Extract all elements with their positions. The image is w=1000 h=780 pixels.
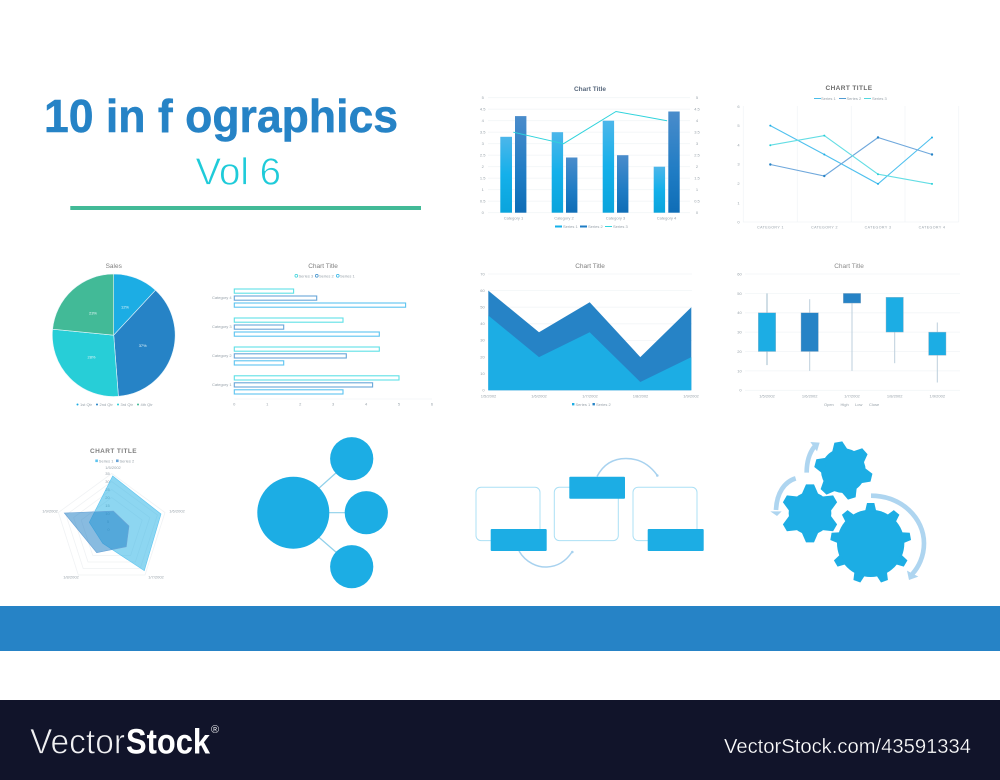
hub circle — [257, 477, 329, 549]
radar value labels: 30 — [105, 479, 110, 484]
y axis labels: 40 — [480, 321, 485, 326]
footer id: VectorStock.com/43591334 — [724, 736, 971, 758]
legend: Series 2 — [596, 402, 611, 407]
y axis labels — [737, 272, 742, 392]
date labels: 1/8/2002 — [887, 394, 903, 398]
category labels: Category 4 — [212, 295, 232, 300]
x axis labels: 1 — [266, 402, 269, 406]
legend: 2nd Qtr — [100, 402, 114, 407]
bars series 3 — [234, 289, 399, 380]
chart title: Chart Title — [574, 86, 606, 93]
footer bar — [0, 700, 1000, 780]
category labels: CATEGORY 4 — [919, 226, 945, 230]
right axis labels: 0.5 — [694, 198, 701, 204]
legend: Series 2 — [588, 224, 603, 229]
columns series 2 — [515, 112, 680, 213]
legend: Close — [869, 402, 880, 407]
legend: Series 3 — [872, 96, 887, 101]
category labels: Category 4 — [657, 216, 677, 220]
satellite circle top — [330, 437, 373, 480]
y axis labels: 6 — [737, 104, 740, 109]
y axis labels: 2 — [737, 181, 740, 186]
category labels — [757, 226, 945, 230]
legend: Open — [824, 402, 834, 407]
right axis labels: 4 — [696, 118, 699, 123]
y axis labels: 4 — [737, 142, 740, 148]
slice labels — [87, 304, 147, 360]
legend: Series 1 — [563, 224, 578, 229]
outline boxes — [476, 487, 697, 541]
footer logo: Vector — [30, 722, 125, 762]
y axis labels: 50 — [480, 304, 485, 310]
y axis labels: 1 — [737, 200, 740, 206]
legend: High — [840, 402, 849, 407]
green underline — [70, 206, 421, 210]
radar date labels: 1/6/2002 — [169, 508, 186, 514]
chart: radar — [42, 448, 186, 580]
y axis labels: 0 — [482, 388, 485, 392]
blue band — [0, 606, 1000, 651]
right axis labels: 2.5 — [694, 152, 701, 158]
legend: Series 3 — [613, 224, 628, 229]
right axis labels: 3 — [696, 141, 699, 146]
x axis labels: 4 — [365, 402, 368, 406]
gear top — [813, 441, 874, 501]
right axis labels: 3.5 — [694, 130, 701, 134]
left axis labels — [480, 95, 486, 215]
area series 1 — [488, 316, 691, 390]
x axis labels: 6 — [431, 402, 434, 406]
radar value labels: 35 — [105, 471, 110, 476]
y axis labels: 10 — [480, 371, 485, 376]
line series 3 — [513, 112, 667, 144]
line series 3 — [769, 135, 933, 185]
legend — [95, 458, 135, 464]
gear large — [830, 503, 911, 583]
right axis labels: 1.5 — [694, 176, 701, 180]
legend — [572, 402, 611, 407]
heading: 10 infographics: 10 in f ographics — [44, 90, 398, 142]
y axis labels: 20 — [737, 349, 742, 354]
legend: Series 1 — [821, 96, 836, 101]
subheading: Vol 6: Vol 6 — [196, 152, 281, 194]
radar date labels: 1/9/2002 — [42, 508, 59, 514]
y axis labels: 40 — [737, 310, 742, 315]
y axis labels: 0 — [737, 220, 740, 224]
curved arrows — [519, 458, 657, 567]
line series 2 — [769, 136, 933, 177]
legend: 4th Qtr — [140, 402, 153, 407]
legend — [555, 224, 628, 229]
y axis labels: 30 — [737, 330, 742, 334]
category labels: Category 3 — [606, 216, 626, 220]
radar value labels: 15 — [105, 503, 110, 508]
line series 1 — [769, 125, 933, 185]
wicks — [767, 293, 937, 382]
radar series 1 — [89, 476, 161, 571]
radar value labels: 20 — [105, 495, 110, 500]
registered mark: ® — [211, 724, 219, 736]
x axis labels: 3 — [332, 402, 335, 406]
legend: Series 2 — [846, 96, 862, 101]
chart: sales pie — [52, 263, 175, 407]
diagram: hub and spoke circles — [257, 437, 388, 588]
slice labels: 28% — [87, 354, 96, 360]
radar date labels: 1/7/2002 — [148, 574, 165, 580]
date labels: 1/9/2002 — [683, 394, 700, 398]
category labels: Category 1 — [212, 382, 232, 387]
radar date labels — [42, 465, 186, 580]
right axis labels: 0 — [696, 210, 699, 215]
chart title: Chart Title — [308, 263, 338, 270]
y axis labels — [737, 104, 740, 224]
x axis labels — [233, 402, 434, 406]
left axis labels: 3.5 — [480, 130, 486, 134]
category labels: Category 2 — [554, 216, 575, 220]
radar series 2 — [64, 511, 129, 553]
date labels: 1/9/2002 — [930, 394, 946, 398]
right axis labels: 1 — [696, 187, 699, 192]
slice labels: 12% — [121, 304, 129, 310]
date labels — [759, 394, 946, 398]
chart title: CHART TITLE — [90, 448, 137, 455]
connectors — [318, 472, 346, 553]
legend: Series 1 — [576, 402, 591, 407]
chart: combo column and line — [480, 86, 701, 229]
left axis labels: 2 — [482, 164, 485, 169]
pie slices — [52, 274, 175, 396]
columns series 1 — [500, 121, 665, 213]
left axis labels: 0.5 — [480, 198, 486, 204]
legend — [814, 96, 887, 101]
legend: Low — [855, 402, 862, 407]
date labels — [481, 394, 700, 398]
x axis labels: 0 — [233, 402, 236, 406]
date labels: 1/6/2002 — [531, 394, 548, 398]
category labels: Category 1 — [504, 216, 524, 220]
radar date labels: 1/8/2002 — [63, 574, 80, 580]
category labels: Category 3 — [212, 324, 232, 329]
left axis labels: 2.5 — [480, 152, 486, 158]
y axis labels: 30 — [480, 338, 485, 342]
left axis labels: 3 — [482, 141, 485, 146]
rotation arrows — [776, 447, 924, 574]
x axis labels: 2 — [299, 402, 302, 406]
chart title: Chart Title — [575, 263, 605, 270]
title block — [44, 90, 421, 210]
legend: Series 3 — [298, 274, 314, 278]
legend: 1st Qtr — [80, 402, 93, 407]
satellite circle middle — [345, 491, 388, 534]
left axis labels: 1.5 — [480, 176, 486, 180]
date labels: 1/8/2002 — [633, 394, 649, 398]
radar value labels — [105, 471, 110, 532]
legend — [824, 402, 880, 407]
area series 2 — [488, 291, 691, 390]
chart: line chart — [737, 85, 959, 230]
legend — [76, 402, 153, 407]
y axis labels: 50 — [737, 291, 742, 296]
date labels: 1/6/2002 — [802, 394, 818, 398]
category labels — [212, 295, 232, 387]
left axis labels: 1 — [482, 187, 485, 192]
legend — [295, 274, 355, 278]
y axis labels: 5 — [737, 123, 740, 128]
chart: horizontal outlined bars — [212, 263, 434, 406]
legend: Series 2 — [319, 274, 334, 278]
legend: 3rd Qtr — [120, 402, 134, 407]
left axis labels: 0 — [482, 210, 485, 215]
arrow heads — [770, 442, 918, 580]
legend: Series 2 — [120, 458, 135, 464]
category labels: CATEGORY 1 — [757, 226, 784, 230]
satellite circle bottom — [330, 545, 373, 588]
slice labels: 23% — [89, 310, 97, 316]
radar value labels: 10 — [105, 511, 110, 516]
category labels: CATEGORY 3 — [865, 226, 891, 230]
y axis labels: 0 — [739, 388, 742, 392]
right axis labels — [694, 95, 701, 215]
footer logo: Stock — [126, 722, 210, 762]
filled label boxes — [491, 477, 704, 551]
slice labels: 37% — [139, 343, 147, 348]
diagram: three step flow — [476, 458, 704, 567]
date labels: 1/5/2002 — [481, 394, 497, 398]
legend: Series 1 — [99, 458, 114, 464]
chart title: CHART TITLE — [825, 85, 873, 92]
chart: candlestick — [737, 263, 960, 407]
candle boxes — [758, 293, 946, 355]
radar grid — [58, 474, 165, 575]
radar value labels: 0 — [107, 527, 110, 532]
left axis labels: 4.5 — [480, 106, 486, 112]
gear left — [781, 484, 839, 542]
category labels — [504, 216, 677, 220]
right axis labels: 2 — [696, 164, 699, 169]
date labels: 1/7/2002 — [582, 394, 599, 398]
y axis labels: 70 — [480, 272, 485, 276]
radar value labels: 5 — [107, 519, 110, 524]
bars series 1 — [234, 303, 406, 394]
left axis labels: 5 — [482, 95, 485, 100]
y axis labels: 60 — [737, 272, 742, 276]
right axis labels: 4.5 — [694, 106, 701, 112]
category labels: Category 2 — [212, 353, 232, 358]
chart title: Sales — [106, 263, 123, 270]
radar date labels: 1/5/2002 — [105, 465, 122, 470]
left axis labels: 4 — [482, 118, 485, 123]
radar value labels: 25 — [105, 487, 110, 492]
legend: Series 1 — [340, 274, 355, 278]
bars series 2 — [234, 296, 373, 387]
right axis labels: 5 — [696, 95, 699, 100]
y axis labels: 10 — [737, 368, 742, 374]
diagram: gears with rotation arrows — [770, 441, 924, 583]
y axis labels — [480, 272, 485, 392]
date labels: 1/5/2002 — [759, 394, 776, 398]
category labels: CATEGORY 2 — [811, 226, 838, 230]
y axis labels: 60 — [480, 288, 485, 293]
arrow tips — [571, 474, 659, 553]
date labels: 1/7/2002 — [844, 394, 861, 398]
y axis labels: 3 — [737, 162, 740, 166]
y axis labels: 20 — [480, 354, 485, 360]
chart title: Chart Title — [834, 263, 864, 270]
x axis labels: 5 — [398, 402, 401, 406]
chart: stacked area — [480, 263, 700, 407]
